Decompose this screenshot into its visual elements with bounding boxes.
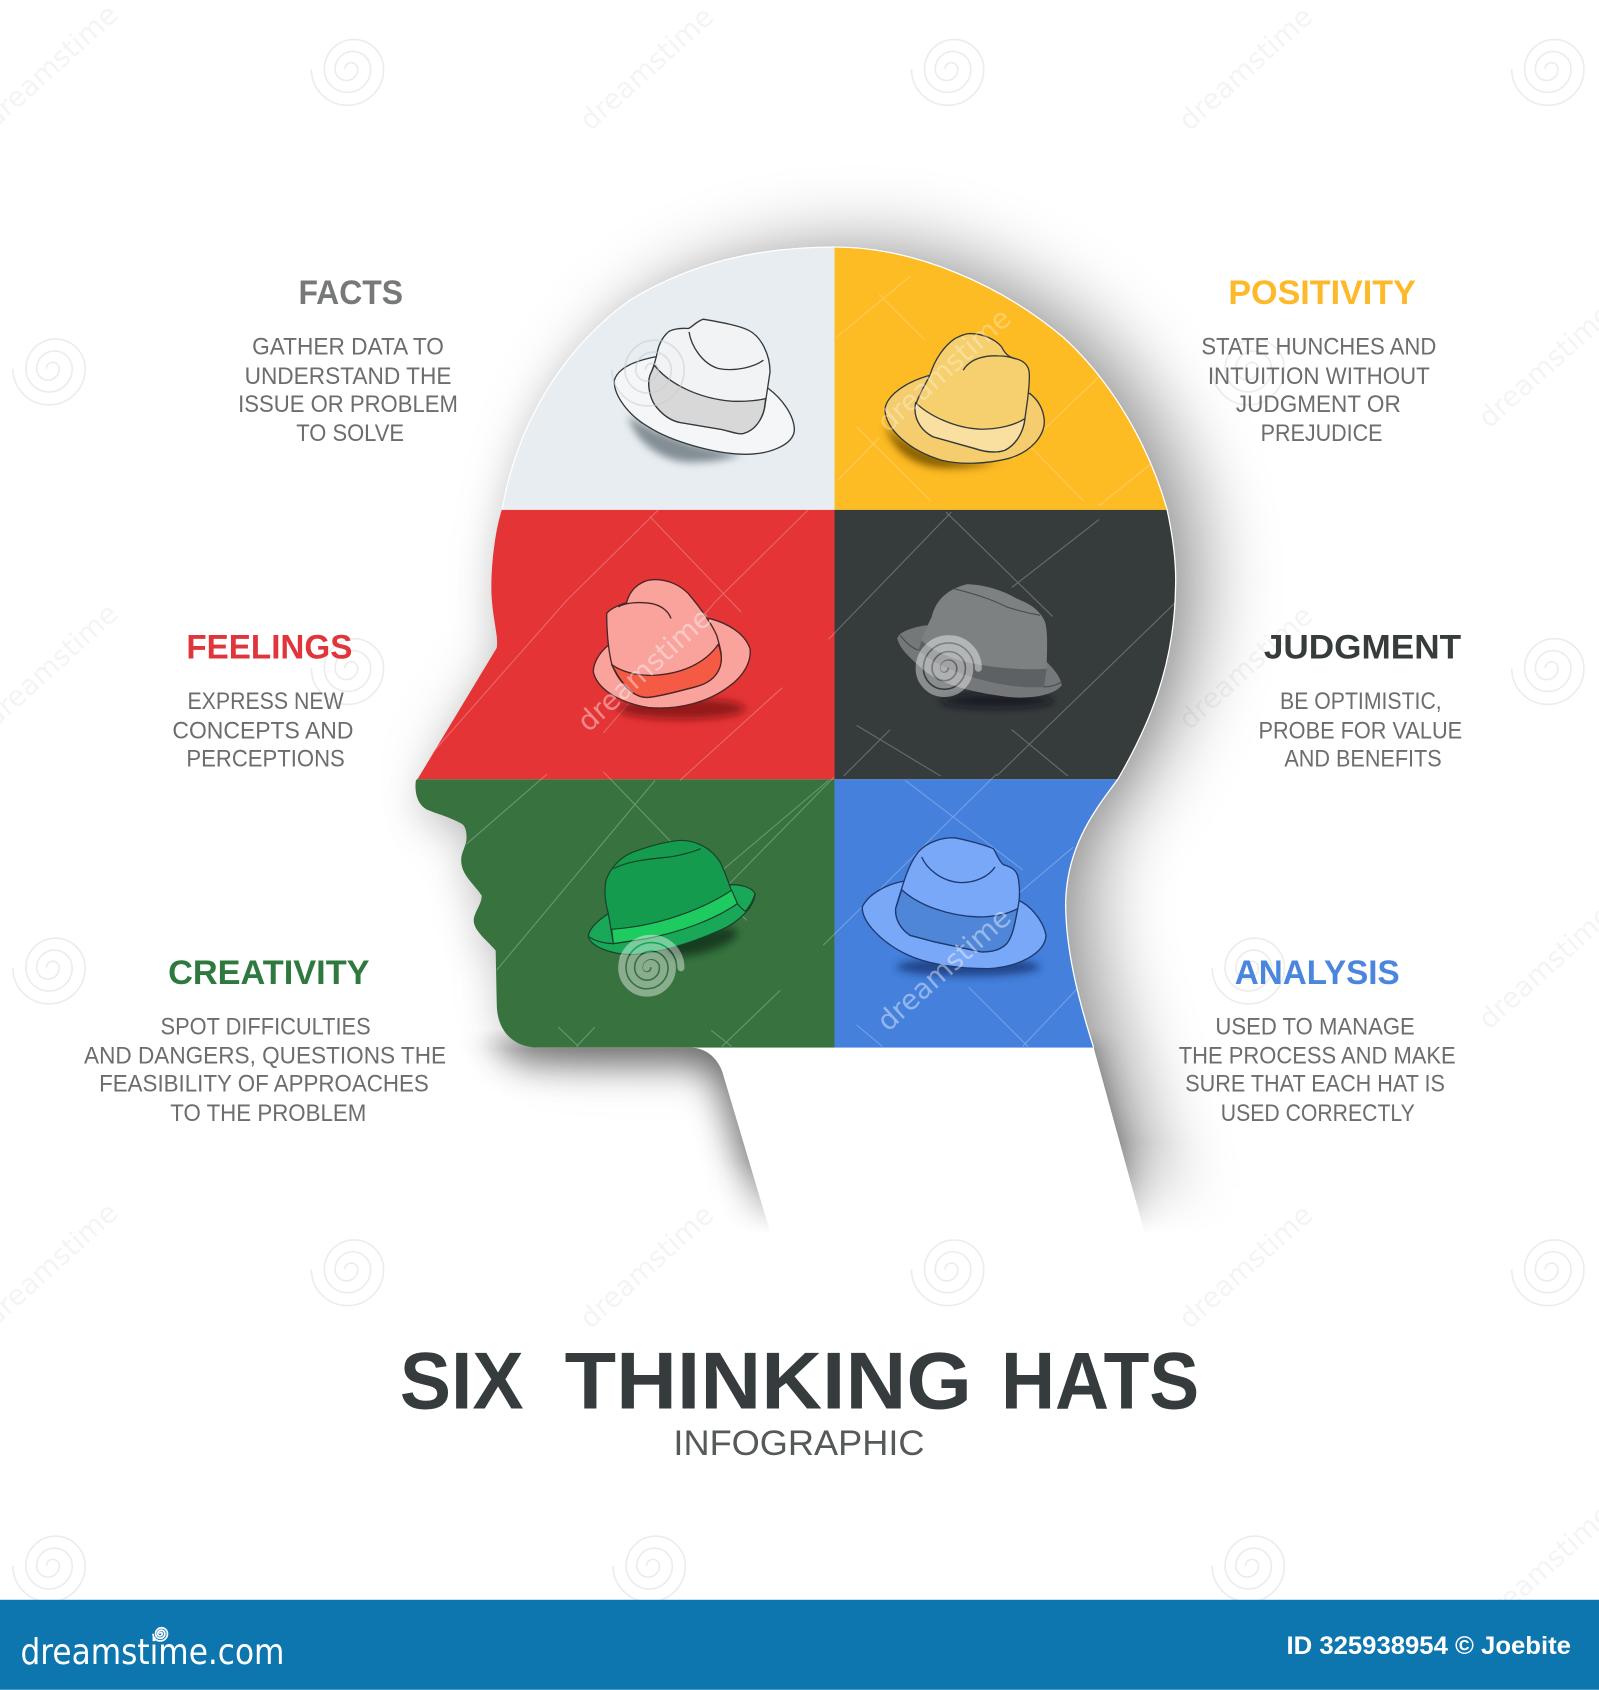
watermark on page background: dreamstime: [573, 0, 720, 137]
description: positivity: JUDGMENT OR: [1236, 391, 1401, 418]
watermark on page background: dreamstime: [1172, 599, 1319, 736]
head silhouette with shadow: [409, 237, 1208, 1254]
icon: yellow hat: [885, 334, 1044, 468]
watermark over hats: dreamstime: [870, 901, 1018, 1038]
watermark over hats: [571, 302, 1018, 1038]
watermark over hats: dreamstime: [571, 601, 718, 738]
icon: green hat: [588, 840, 755, 963]
text block: facts: [238, 274, 458, 447]
footer image id: ID 325938954 © Joebite: [1287, 1633, 1571, 1660]
title: SIX: [400, 1337, 524, 1427]
description: creativity: AND DANGERS, QUESTIONS THE: [84, 1043, 446, 1070]
panel: white hat facts: [502, 248, 834, 510]
description: facts: ISSUE OR PROBLEM: [238, 391, 458, 418]
description: facts: UNDERSTAND THE: [245, 363, 451, 390]
heading: judgment: JUDGMENT: [1264, 629, 1461, 667]
description: facts: TO SOLVE: [296, 420, 404, 447]
description: analysis: USED TO MANAGE: [1215, 1014, 1415, 1041]
description: judgment: AND BENEFITS: [1284, 745, 1442, 772]
description: positivity: INTUITION WITHOUT: [1208, 363, 1430, 390]
heading: creativity: CREATIVITY: [168, 954, 370, 992]
description: judgment: PROBE FOR VALUE: [1259, 717, 1462, 744]
title: THINKING: [565, 1337, 972, 1427]
description: facts: GATHER DATA TO: [252, 334, 444, 361]
description: creativity: FEASIBILITY OF APPROACHES: [99, 1071, 429, 1098]
description: feelings: EXPRESS NEW: [187, 688, 344, 715]
panel: green hat creativity: [409, 779, 835, 1048]
description: judgment: BE OPTIMISTIC,: [1280, 688, 1442, 715]
watermark on page background: dreamstime: [573, 1198, 720, 1335]
heading: positivity: POSITIVITY: [1228, 274, 1416, 312]
panel: black hat judgment: [835, 510, 1190, 779]
description: facts: [238, 334, 458, 447]
text block: creativity: [84, 954, 446, 1127]
panel: red hat feelings: [409, 510, 835, 779]
description: feelings: CONCEPTS AND: [172, 717, 353, 744]
text block: judgment: [1259, 629, 1462, 772]
description: positivity: PREJUDICE: [1261, 420, 1382, 447]
description: analysis: USED CORRECTLY: [1221, 1100, 1415, 1127]
text block: feelings: [172, 629, 353, 772]
heading: facts: FACTS: [298, 274, 403, 312]
description: creativity: SPOT DIFFICULTIES: [161, 1014, 371, 1041]
title: [400, 1337, 1199, 1427]
panel: yellow hat positivity: [834, 248, 1166, 510]
icon: black hat: [897, 584, 1062, 708]
text block: analysis: [1179, 954, 1456, 1127]
description: feelings: [172, 688, 353, 772]
watermark over hats: dreamstime: [870, 302, 1018, 439]
text block: positivity: [1201, 274, 1436, 447]
footer logo: dreamstime.com: [20, 1632, 284, 1673]
panel: blue hat analysis: [834, 779, 1117, 1048]
heading: analysis: ANALYSIS: [1235, 954, 1400, 992]
icon: blue hat: [862, 838, 1046, 976]
head colour panels: [409, 237, 1190, 1048]
icon: red hat: [593, 580, 750, 719]
description: creativity: [84, 1014, 446, 1127]
subtitle: INFOGRAPHIC: [673, 1423, 924, 1463]
icon: white hat: [614, 319, 794, 462]
description: positivity: [1201, 334, 1436, 447]
watermark on page background: dreamstime: [1172, 1198, 1319, 1335]
watermark on page background: dreamstime: [1172, 0, 1319, 137]
description: judgment: [1259, 688, 1462, 772]
description: analysis: [1179, 1014, 1456, 1127]
footer bar: [0, 1600, 1599, 1690]
description: analysis: SURE THAT EACH HAT IS: [1185, 1071, 1445, 1098]
title: HATS: [1001, 1337, 1199, 1427]
heading: feelings: FEELINGS: [186, 629, 352, 667]
description: feelings: PERCEPTIONS: [186, 745, 345, 772]
description: positivity: STATE HUNCHES AND: [1201, 334, 1436, 361]
description: creativity: TO THE PROBLEM: [170, 1100, 366, 1127]
description: analysis: THE PROCESS AND MAKE: [1179, 1043, 1456, 1070]
